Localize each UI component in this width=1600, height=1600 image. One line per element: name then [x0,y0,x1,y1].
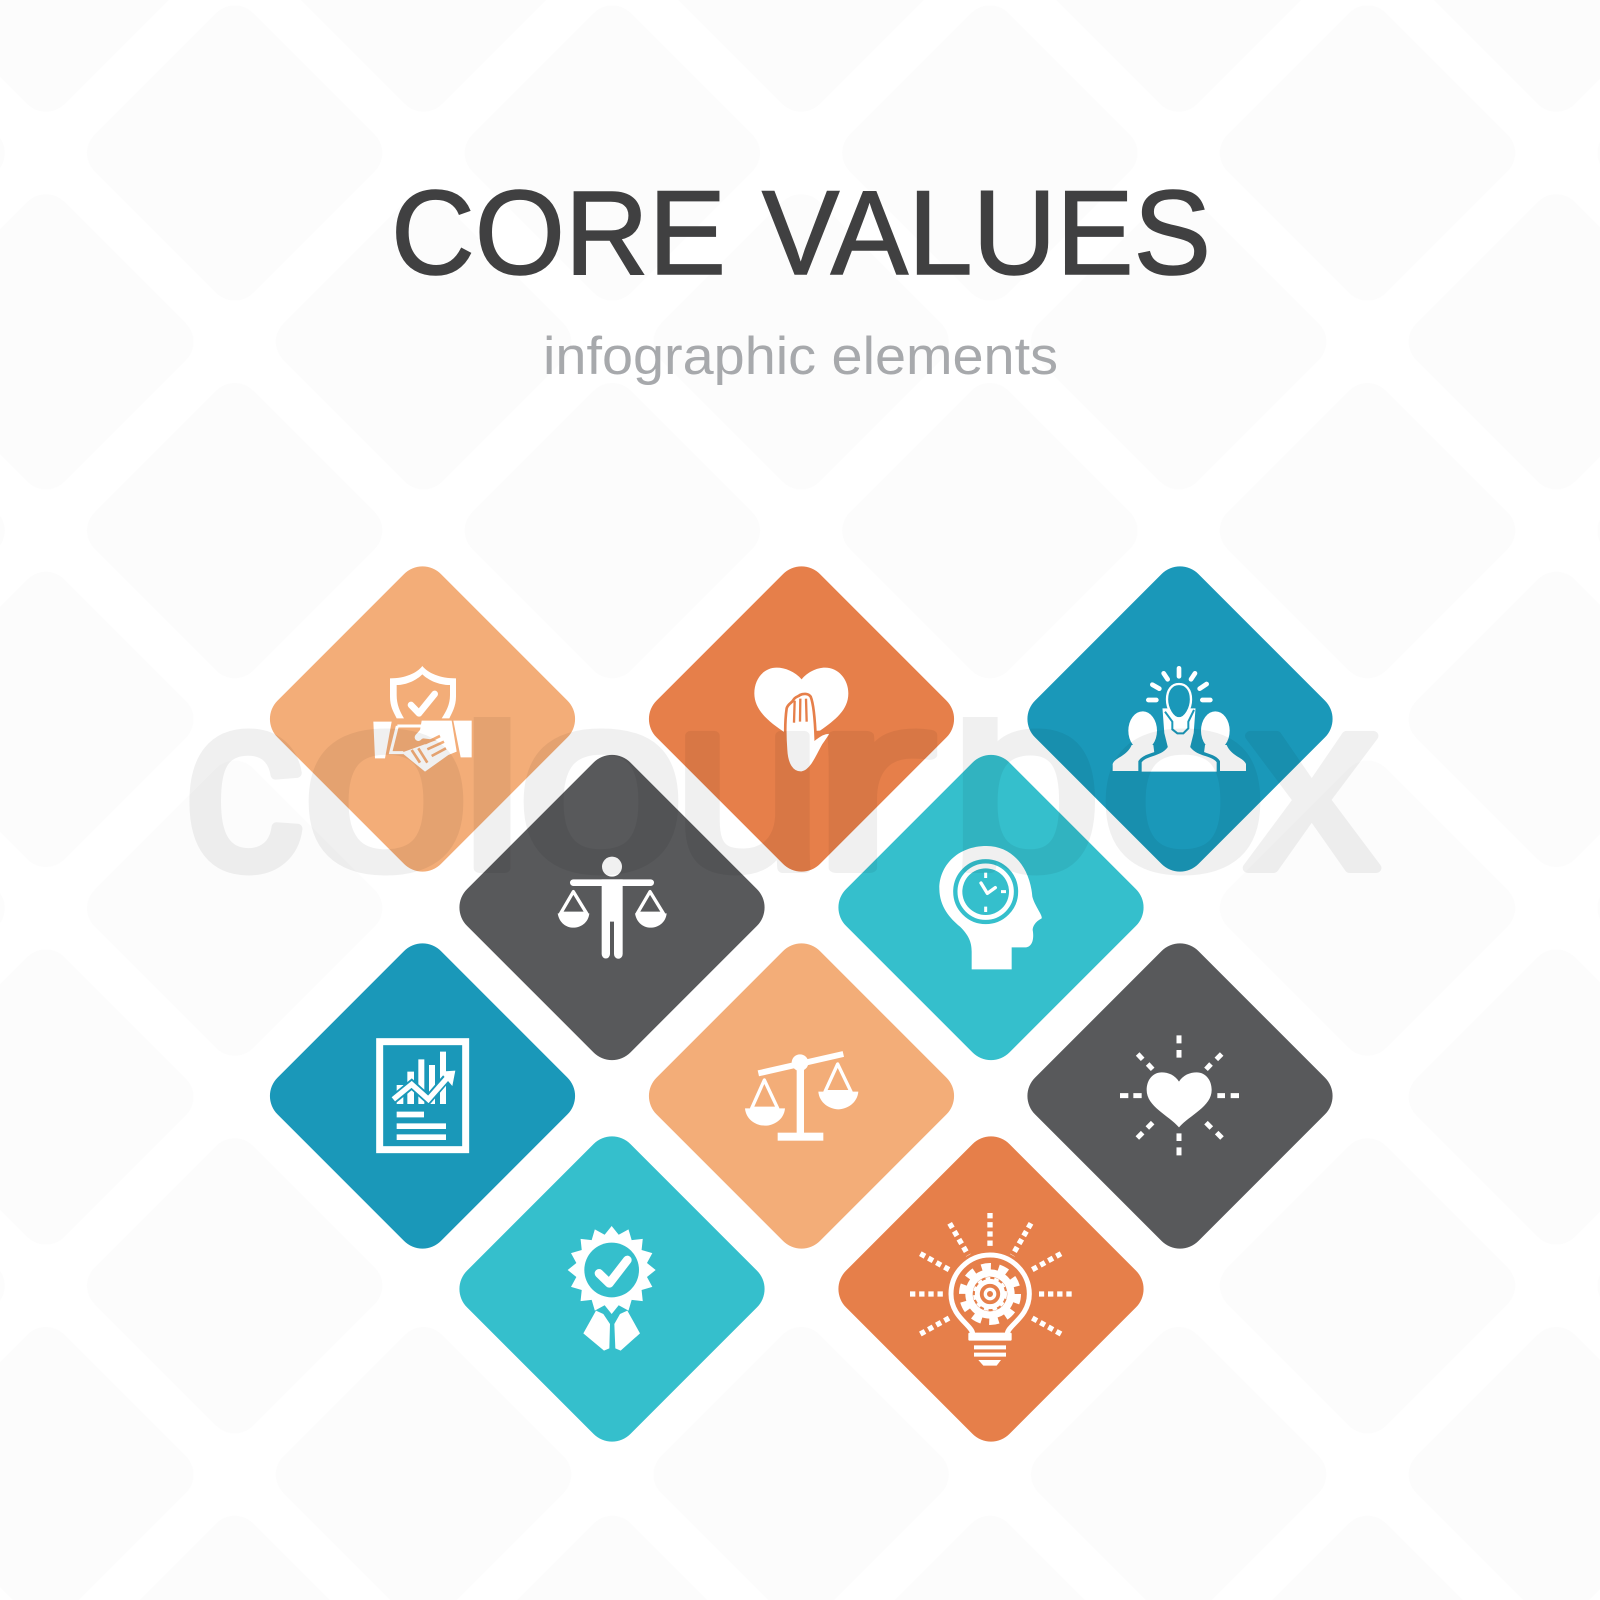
watermark: r [810,642,936,921]
icon: heart and raised hand [754,668,848,773]
icon: people with idea [1113,668,1246,773]
watermark: o [1099,642,1267,921]
watermark: o [302,642,470,921]
panel: fairness [449,744,775,1071]
title: VALUES [762,166,1211,300]
icon: award rosette with check [568,1226,656,1351]
panel: quality [449,1126,775,1452]
watermark: o [517,642,685,921]
icon: report with chart [380,1042,466,1150]
icon: balance scale [745,1054,858,1141]
panel: love and passion [1017,933,1343,1259]
icon: light bulb with gear [910,1213,1072,1366]
watermark: c [184,642,304,921]
panel: partnership trust [259,556,586,882]
subtitle: infographic elements [543,327,1058,386]
watermark: b [950,642,1101,921]
watermark: l [460,642,524,921]
icon: shield and handshake [373,666,472,772]
panel: teamwork [1017,556,1343,882]
panel: innovation [828,1126,1154,1452]
icon: person holding scales [558,857,667,959]
panel: balance [638,933,965,1259]
panel: report and transparency [259,933,586,1259]
icon: shining heart [1120,1035,1239,1155]
panel: time and focus [828,744,1154,1071]
watermark [190,717,1382,876]
icon: head with clock [939,846,1042,969]
watermark: x [1245,642,1379,921]
watermark: u [673,642,823,921]
title: CORE [391,166,726,300]
panel: honesty [638,556,965,882]
title [391,166,1211,300]
